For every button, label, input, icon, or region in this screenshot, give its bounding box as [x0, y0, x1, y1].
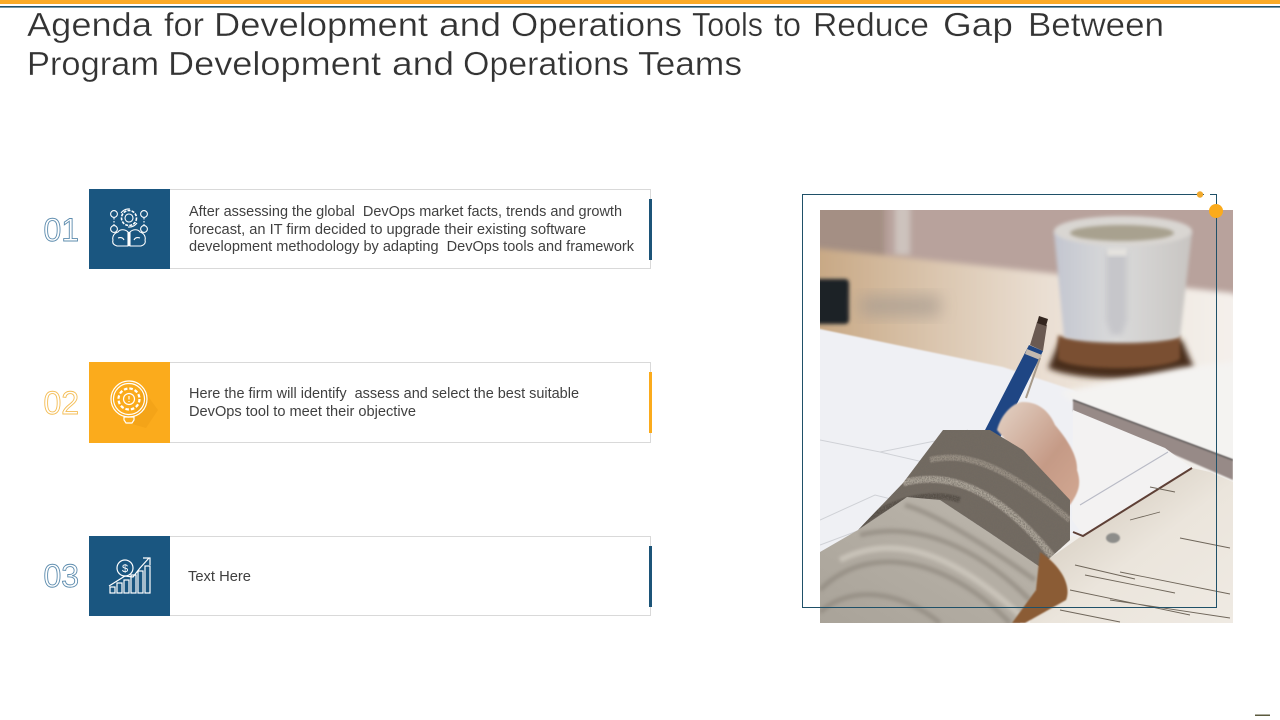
photo: hand writing at a desk — [820, 210, 1233, 623]
text card 03 — [170, 536, 650, 616]
title: Program — [27, 45, 159, 82]
agenda item 02 — [44, 362, 652, 443]
number 02: 02 — [44, 385, 79, 421]
accent bar 01 — [649, 199, 652, 260]
title: Teams — [638, 45, 742, 82]
agenda item 01 — [44, 189, 652, 269]
title: and — [439, 6, 501, 43]
title — [27, 6, 1164, 82]
white paper — [820, 328, 1082, 552]
description 03: Text Here — [188, 569, 251, 585]
loose paper sheets — [1073, 410, 1178, 458]
icon: gear and brain — [111, 209, 147, 246]
text card 01 — [170, 190, 650, 268]
title: Gap — [943, 6, 1013, 43]
icon tile 01 — [89, 189, 170, 269]
pen — [984, 316, 1048, 440]
description 02: DevOps tool to meet their objective — [189, 404, 416, 420]
tablet — [1072, 362, 1212, 424]
description 01: After assessing the global DevOps market facts, trends and growth — [189, 204, 622, 220]
description 02: Here the firm will identify assess and select the best suitable — [189, 386, 579, 402]
icon: light bulb with gear — [111, 381, 158, 428]
desk surface — [820, 246, 1233, 390]
top accent bars — [0, 0, 1280, 8]
agenda item 03 — [44, 536, 652, 616]
title: Development — [214, 6, 428, 43]
title: and — [392, 45, 454, 82]
blurred background wall — [820, 210, 1233, 297]
hand — [997, 402, 1079, 505]
small orange dot — [1197, 191, 1203, 198]
large orange dot — [1209, 204, 1223, 218]
accent bar 03 — [649, 546, 652, 607]
title: Operations — [511, 6, 682, 43]
title: Agenda — [27, 6, 153, 43]
title: Development — [168, 45, 381, 82]
title: to — [774, 6, 801, 43]
title: Operations — [463, 45, 629, 82]
description 02 — [189, 386, 579, 420]
icon: rising bar chart with dollar — [109, 558, 150, 593]
wood table — [1030, 468, 1233, 623]
icon: rising bar chart with dollar: $ — [122, 563, 128, 575]
accent bar 02 — [649, 372, 652, 433]
description 01: development methodology by adapting DevOps tools and framework — [189, 239, 635, 255]
icon tile 02 — [89, 362, 170, 443]
knitted cuff — [858, 430, 1070, 567]
title: for — [164, 6, 204, 43]
sweater sleeve — [820, 497, 1040, 623]
title: Reduce — [813, 6, 929, 43]
text card 02 — [170, 362, 650, 442]
shadow on wood — [1012, 552, 1068, 623]
title: Tools — [692, 6, 763, 43]
title: Between — [1028, 6, 1164, 43]
number 03: 03 — [44, 558, 79, 594]
description 01 — [189, 204, 635, 255]
number 01: 01 — [44, 212, 79, 248]
icon tile 03 — [89, 536, 170, 616]
photo frame with accent dots — [802, 190, 1223, 608]
slide corner mark — [1255, 714, 1270, 716]
description 01: forecast, an IT firm decided to upgrade their existing software — [189, 222, 586, 238]
coffee mug — [1048, 216, 1194, 378]
